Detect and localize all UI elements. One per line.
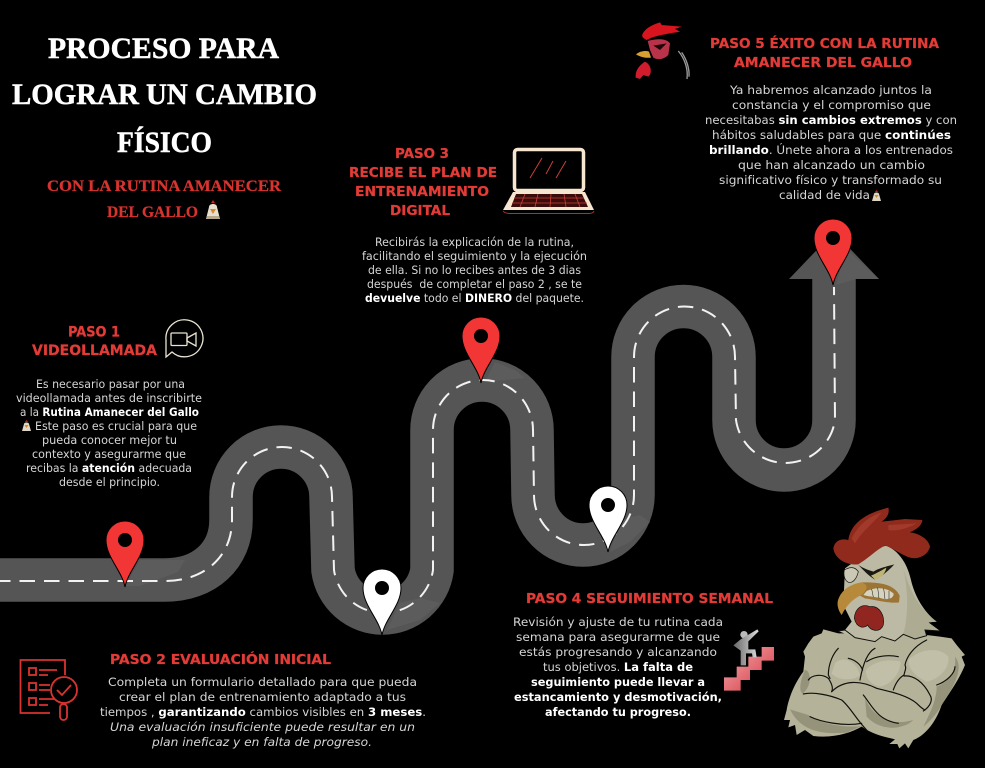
title: LOGRAR UN CAMBIO [12, 79, 317, 111]
icon: laptop [503, 150, 594, 214]
text: paso 2 body: crear el plan de entrenamiento adaptado a tus [119, 690, 406, 704]
heading: paso 5: AMANECER DEL GALLO [734, 55, 912, 71]
text: paso 1 body: a la Rutina Amanecer del Gallo [20, 405, 199, 419]
text: paso 5 body: Ya habremos alcanzado juntos la [729, 83, 932, 97]
text: paso 5 body: significativo físico y transformado su [719, 173, 942, 187]
rooster head [833, 508, 940, 642]
icon: checklist with magnifier [20, 660, 77, 720]
text: paso 2 body [100, 675, 426, 749]
panel: paso 3 [349, 146, 594, 305]
panel: paso 1 [16, 320, 203, 489]
illustration: muscular rooster [784, 508, 965, 748]
icon: rooster head small [636, 22, 689, 79]
heading: paso 3 [349, 146, 497, 219]
title: PROCESO PARA [48, 33, 280, 65]
heading: paso 3: RECIBE EL PLAN DE [349, 165, 497, 181]
text: paso 5 body: calidad de vida [779, 188, 870, 202]
heading: paso 1: VIDEOLLAMADA [32, 343, 158, 359]
text: paso 2 body: Una evaluación insuficiente puede resultar en un [110, 720, 415, 734]
icon: person climbing stairs [724, 629, 774, 691]
icon: rooster emoji [206, 200, 220, 219]
pin 5 [814, 219, 852, 285]
subtitle: DEL GALLO [107, 204, 198, 221]
text: paso 4 body: estás progresando y alcanzando [519, 645, 717, 659]
text: paso 1 body: recibas la atención adecuada [26, 461, 192, 475]
rooster body [784, 629, 965, 748]
text: paso 4 body: seguimiento puede llevar a [531, 675, 705, 689]
panel: paso 5 [636, 22, 957, 202]
pin 1 [106, 521, 144, 587]
heading: paso 4: PASO 4 SEGUIMIENTO SEMANAL [526, 592, 773, 607]
text: paso 3 body: Recibirás la explicación de la rutina, [375, 235, 574, 249]
heading: paso 5 [710, 35, 940, 71]
text: paso 1 body: Este paso es crucial para que [35, 419, 197, 433]
text: paso 1 body [16, 377, 202, 489]
text: paso 3 body: facilitando el seguimiento y la ejecución [362, 249, 587, 263]
text: paso 3 body: devuelve todo el DINERO del paquete. [365, 291, 584, 305]
heading: paso 3: DIGITAL [390, 203, 450, 219]
heading: paso 1: PASO 1 [68, 324, 120, 340]
text: paso 4 body: Revisión y ajuste de tu rutina cada [513, 615, 723, 629]
text: paso 3 body: después de completar el paso 2 , se te [367, 277, 582, 291]
title [12, 33, 317, 159]
icon: video call [166, 320, 203, 357]
heading: paso 2: PASO 2 EVALUACIÓN INICIAL [110, 652, 331, 668]
text: paso 2 body: tiempos , garantizando cambios visibles en 3 meses. [100, 705, 426, 719]
heading: paso 5: PASO 5 ÉXITO CON LA RUTINA [710, 35, 940, 52]
pin 3 [462, 317, 500, 383]
subtitle: CON LA RUTINA AMANECER [47, 178, 282, 195]
icon: rooster emoji small [872, 190, 881, 201]
text: paso 1 body: contexto y asegurarme que [32, 447, 186, 461]
text: paso 2 body: plan ineficaz y en falta de progreso. [151, 735, 372, 749]
winding road with arrow [0, 232, 879, 630]
text: paso 5 body: necesitabas sin cambios extremos y con [705, 113, 957, 127]
text: paso 1 body: pueda conocer mejor tu [42, 433, 177, 447]
text: paso 5 body [705, 83, 957, 202]
text: paso 4 body [513, 615, 723, 719]
heading: paso 3: PASO 3 [395, 146, 449, 162]
text: paso 4 body: tus objetivos. La falta de [543, 660, 693, 674]
panel: paso 4 [513, 592, 774, 719]
pin 4 [589, 486, 627, 552]
pin 2 [363, 569, 401, 635]
text: paso 4 body: semana para asegurarme de que [516, 630, 720, 644]
subtitle [47, 178, 282, 221]
text: paso 4 body: afectando tu progreso. [545, 705, 691, 719]
icon: rooster emoji small [22, 420, 31, 431]
text: paso 5 body: brillando. Únete ahora a los entrenados [709, 142, 953, 157]
title: FÍSICO [117, 126, 212, 159]
heading: paso 3: ENTRENAMIENTO [355, 184, 489, 200]
text: paso 3 body: de ella. Si no lo recibes antes de 3 dias [368, 263, 581, 277]
text: paso 5 body: constancia y el compromiso que [732, 98, 931, 112]
text: paso 5 body: que han alcanzado un cambio [738, 158, 925, 172]
text: paso 1 body: videollamada antes de inscribirte [16, 391, 202, 405]
text: paso 4 body: estancamiento y desmotivación, [514, 690, 722, 704]
text: paso 1 body: desde el principio. [59, 475, 160, 489]
text: paso 1 body: Es necesario pasar por una [36, 377, 185, 391]
text: paso 3 body [362, 235, 587, 305]
heading: paso 1 [32, 324, 158, 359]
text: paso 2 body: Completa un formulario detallado para que pueda [108, 675, 417, 689]
text: paso 5 body: hábitos saludables para que continúes [712, 128, 951, 142]
panel: paso 2 [20, 652, 426, 749]
